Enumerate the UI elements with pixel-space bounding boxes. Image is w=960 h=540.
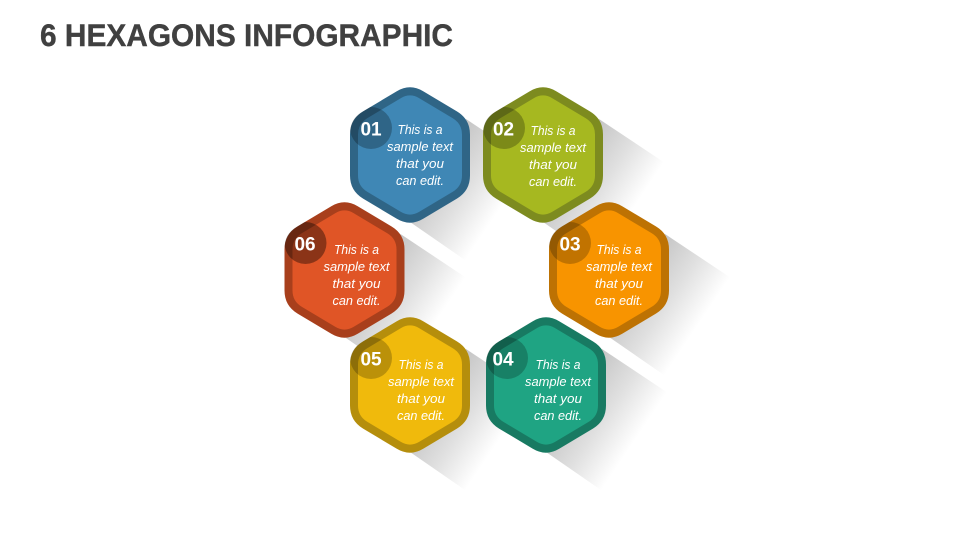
hexagon 04 [486,321,602,449]
hexagon 03 [549,206,665,334]
text 03 [586,242,653,308]
text 05: This is a [398,357,444,372]
number badge 06: 06 [294,234,316,256]
text 01: that you [396,156,444,171]
text 01: can edit. [396,173,444,188]
text 05 [388,357,455,423]
text 05: that you [397,391,445,406]
text 06: can edit. [332,293,380,308]
text 04 [525,357,592,423]
number badge 05: 05 [360,350,382,370]
text 01: sample text [387,139,454,154]
text 05: sample text [388,374,455,389]
text 02: can edit. [529,174,577,189]
number badge 02: 02 [493,120,514,140]
text 06: that you [332,276,381,291]
text 06: This is a [334,242,379,257]
text 03: that you [595,276,643,291]
text 04: This is a [536,357,580,372]
text 06 [324,242,391,308]
hexagon 02 [483,91,599,219]
text 02: sample text [520,140,587,155]
long shadows [344,119,737,499]
text 03: can edit. [595,293,643,308]
text 04: can edit. [534,408,582,423]
text 04: sample text [525,374,592,389]
text 02 [520,123,587,189]
text 02: This is a [530,123,576,138]
text 02: that you [529,157,577,172]
text 03: sample text [586,259,653,274]
hexagon 01 [350,91,466,219]
text 01 [387,122,454,188]
text 05: can edit. [397,408,445,423]
title: 6 HEXAGONS INFOGRAPHIC [40,17,453,53]
text 01: This is a [398,122,442,137]
hexagon 05 [350,321,466,449]
text 03: This is a [596,242,642,257]
number badge 01: 01 [360,120,382,140]
text 06: sample text [324,259,391,274]
text 04: that you [534,391,582,406]
number badge 04: 04 [492,350,514,370]
hexagon 06 [284,206,400,334]
number badge 03: 03 [559,234,581,256]
